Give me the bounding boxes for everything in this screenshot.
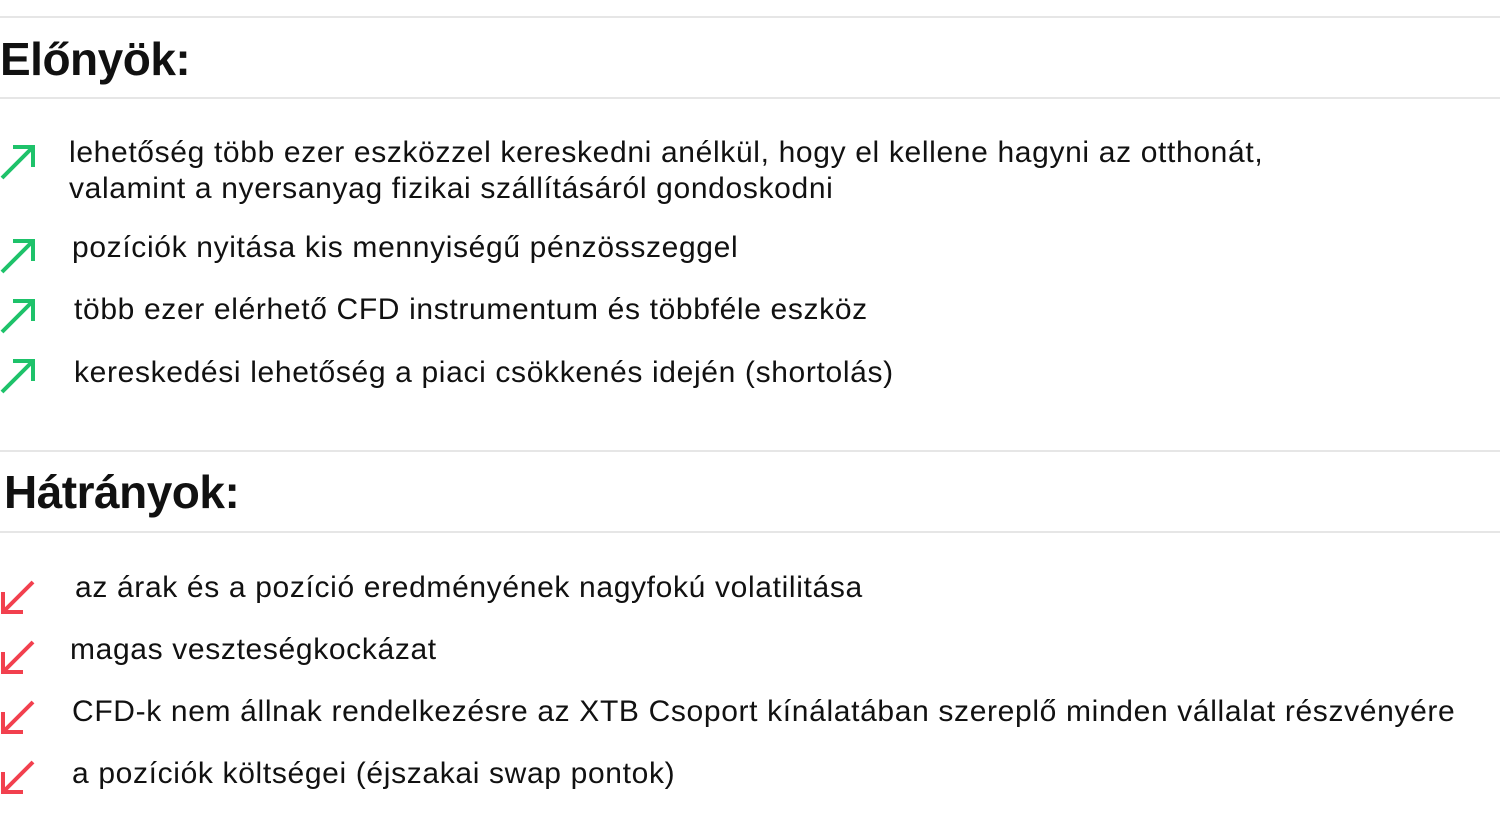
- text: advantage 4: kereskedési lehetőség a piaci csökkenés idején (shortolás): [74, 356, 894, 389]
- icon: red arrow 2: [1, 640, 34, 674]
- text: disadvantage 3: CFD-k nem állnak rendelkezésre az XTB Csoport kínálatában szereplő minden vállalat részvényére: [72, 695, 1455, 728]
- text: disadvantage 1: az árak és a pozíció eredményének nagyfokú volatilitása: [75, 571, 863, 604]
- icon: red arrow 1: [1, 580, 34, 614]
- text: advantage 1: valamint a nyersanyag fizikai szállításáról gondoskodni: [69, 172, 833, 205]
- text: advantage 2: pozíciók nyitása kis mennyiségű pénzösszeggel: [72, 231, 738, 264]
- icon: green arrow 2: [0, 239, 35, 274]
- list: disadvantages: [1, 571, 1455, 794]
- icon: red arrow 3: [1, 700, 34, 734]
- text: advantage 1: [69, 136, 1263, 205]
- heading: advantages: Előnyök:: [0, 33, 190, 85]
- list: advantages: [0, 136, 1263, 394]
- icon: green arrow 3: [0, 299, 35, 334]
- text: disadvantage 2: magas veszteségkockázat: [70, 633, 437, 666]
- heading: disadvantages: Hátrányok:: [4, 466, 239, 518]
- text: advantage 1: lehetőség több ezer eszközzel kereskedni anélkül, hogy el kellene hagyni az otthonát,: [69, 136, 1263, 169]
- text: advantage 3: több ezer elérhető CFD instrumentum és többféle eszköz: [74, 293, 868, 326]
- icon: green arrow 1: [0, 145, 35, 180]
- icon: red arrow 4: [1, 760, 34, 794]
- icon: green arrow 4: [0, 359, 35, 394]
- text: disadvantage 4: a pozíciók költségei (éjszakai swap pontok): [72, 757, 675, 790]
